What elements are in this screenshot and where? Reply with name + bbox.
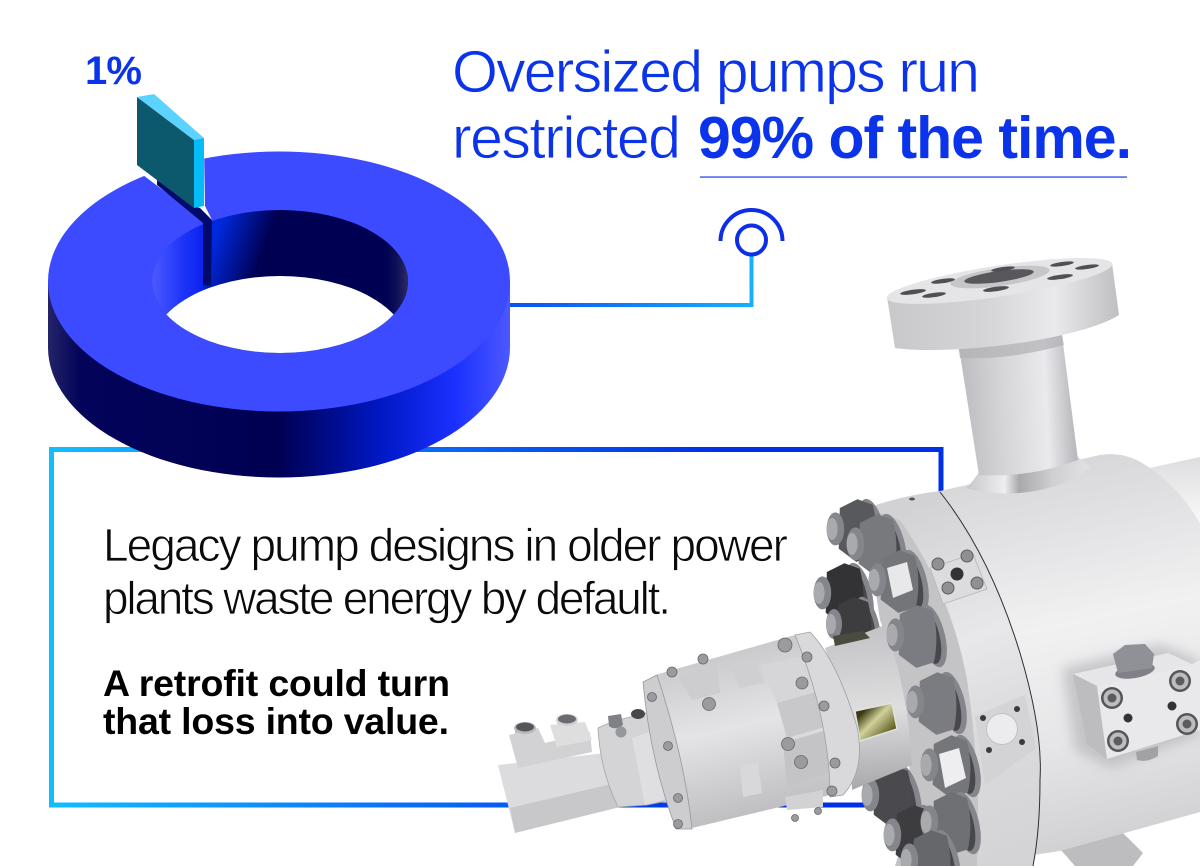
collar — [966, 457, 1090, 494]
heading: restricted — [452, 105, 681, 171]
oil port hole — [909, 498, 915, 500]
coupling hub — [598, 709, 672, 807]
body text: Legacy pump designs in older power — [103, 519, 788, 571]
text panel outline — [52, 450, 941, 805]
housing bolts — [648, 638, 840, 828]
body text: plants waste energy by default. — [103, 572, 671, 624]
icon: target signal — [720, 210, 782, 254]
shaft spacer — [825, 625, 912, 790]
flange seam — [940, 492, 1040, 866]
connector from ring to icon — [510, 256, 752, 305]
port plate — [975, 695, 1036, 785]
donut chart: 99% ring with 1% slice lifted out — [48, 94, 510, 478]
ring outer wall — [48, 282, 510, 478]
small instrument plate — [930, 550, 987, 604]
bearing housing — [643, 632, 860, 829]
spacer window — [833, 631, 870, 646]
neck shadow under flange — [958, 330, 1064, 358]
ring top surface — [48, 152, 510, 412]
main barrel — [940, 454, 1200, 855]
slice gap — [130, 130, 212, 222]
terminal connectors — [509, 714, 592, 768]
pump illustration — [498, 249, 1200, 866]
flange face — [867, 508, 978, 866]
top flange — [884, 249, 1119, 350]
callout text: A retrofit could turn — [103, 662, 450, 704]
drive shaft block — [498, 752, 628, 833]
heading — [452, 39, 1132, 171]
front bolts — [847, 511, 986, 866]
heading: 99% of the time. — [698, 105, 1132, 171]
rear bolts — [814, 496, 949, 866]
callout text: that loss into value. — [103, 700, 449, 742]
heading: Oversized pumps run — [452, 39, 980, 105]
callout text — [103, 662, 450, 742]
heading underline — [700, 176, 1127, 178]
label: 1%: 1% — [85, 49, 142, 93]
valve block — [1062, 644, 1200, 768]
neck — [957, 320, 1078, 475]
dark cut faces of the ring — [157, 180, 212, 286]
body text — [103, 519, 788, 624]
rear barrel — [1060, 457, 1200, 850]
front flange band — [867, 491, 1040, 866]
ring inner wall — [152, 210, 408, 353]
1% slice — [137, 94, 204, 208]
olive sight window — [855, 703, 897, 741]
foot — [1060, 833, 1143, 866]
